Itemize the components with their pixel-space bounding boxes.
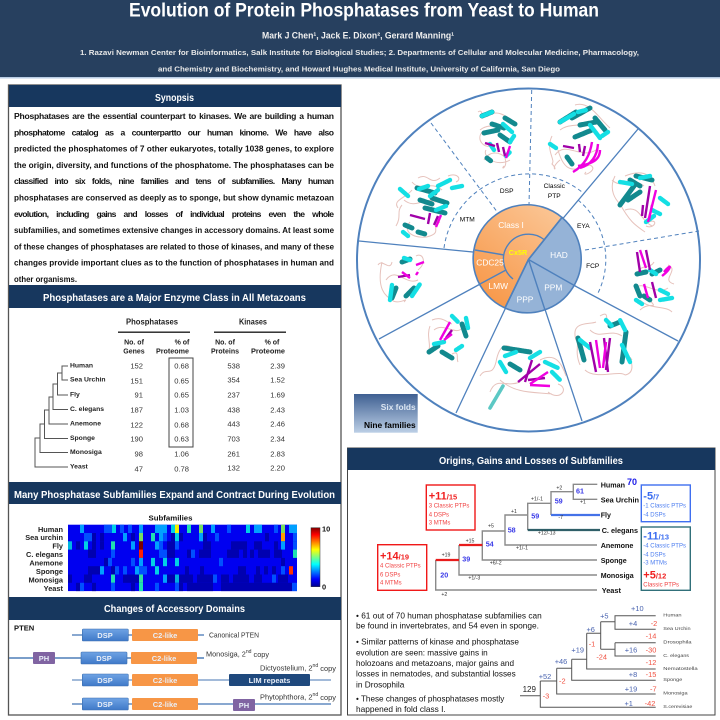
bullet text: be found in invertebrates, and 54 even in sponge. <box>356 621 539 631</box>
heatmap row labels: C. elegans <box>26 550 63 559</box>
kinase gains: +19 <box>571 646 584 654</box>
table headers: Kinases <box>239 318 267 326</box>
species labels: Monosiga <box>70 449 102 456</box>
edge labels: +19 <box>442 552 451 558</box>
synopsis text: the origin, diversity, and functions of the phosphatome. The phosphatases can be <box>14 160 334 170</box>
hub labels: HAD <box>550 250 568 260</box>
node counts: 61 <box>576 486 584 496</box>
kinase tree species <box>663 612 698 710</box>
tree species labels: Yeast <box>602 586 622 595</box>
panel: synopsis <box>9 85 341 284</box>
protein: PPM <box>575 314 632 375</box>
callout: +11/15: +11/15 <box>429 491 457 503</box>
table numbers: 132 <box>227 464 240 472</box>
edge labels: +1/-3 <box>468 575 480 581</box>
table numbers: 0.63 <box>174 434 189 444</box>
table numbers: 0.68 <box>174 362 189 370</box>
kinase gains: +4 <box>629 619 637 628</box>
bullet text <box>356 610 542 714</box>
hub: orange class I sector <box>473 205 562 308</box>
kinase gains: +46 <box>555 657 567 666</box>
node counts: 59 <box>555 496 563 506</box>
table numbers: 237 <box>227 390 240 400</box>
panel: accessory domains <box>9 597 341 711</box>
table numbers: 703 <box>227 434 240 444</box>
domain row: Phytophthora: nd <box>312 692 318 698</box>
table numbers: 0.68 <box>174 420 189 430</box>
kinase tree species: Monosiga <box>663 690 688 696</box>
synopsis text: evolution, including gains and losses of individual proteins even the whole <box>14 209 334 219</box>
table numbers: 1.52 <box>270 376 285 384</box>
domain row: Dictyostelium: Dictyostelium, 2 <box>260 664 311 672</box>
hub labels: CDC25 <box>476 258 504 268</box>
table numbers: 152 <box>130 362 143 370</box>
tree species labels: Human <box>601 480 625 490</box>
kinase gains: +6 <box>586 625 595 634</box>
table numbers: 2.46 <box>270 420 285 428</box>
edge labels <box>441 485 586 598</box>
domain row: canonical PTEN: DSP <box>97 631 113 640</box>
table numbers: 91 <box>135 390 143 400</box>
edge labels: +1 <box>580 500 586 506</box>
node counts: 39 <box>462 554 470 564</box>
protein: MTM <box>396 175 462 237</box>
edge labels: +15 <box>466 539 475 545</box>
domain row: Monosiga: PH <box>39 654 49 663</box>
table numbers: 261 <box>227 450 240 458</box>
synopsis text <box>14 111 334 284</box>
panel: origins, gains and losses <box>348 448 715 715</box>
protein: EYA <box>612 173 668 232</box>
kinase tree species: Sea Urchin <box>663 626 691 632</box>
tree species labels: Anemone <box>601 541 633 550</box>
domain row: Phytophthora: PH <box>239 701 249 710</box>
callout: -11/13 and +5/12: Classic PTPs <box>643 583 679 589</box>
protein: CDC25 <box>378 255 424 302</box>
node counts: 59 <box>531 512 539 520</box>
authors: Mark J Chen¹, Jack E. Dixon², Gerard Manning¹ <box>262 30 454 40</box>
heatmap row labels: Fly <box>52 542 64 550</box>
table headers: Proteome <box>156 348 189 356</box>
family labels: PTP <box>548 193 561 200</box>
kinase losses: -7 <box>650 684 657 694</box>
protein: PPP <box>480 346 566 408</box>
table numbers: 0.65 <box>174 376 189 386</box>
table headers: No. of <box>215 340 236 346</box>
callout: -11/13 and +5/12 <box>641 527 690 590</box>
affiliations <box>80 48 639 74</box>
synopsis text: other organisms. <box>14 274 77 284</box>
species tree <box>35 366 68 467</box>
title: Evolution of Protein Phosphatases from Yeast to Human <box>129 0 599 22</box>
table headers: Genes <box>123 348 145 356</box>
table headers: % of <box>175 340 190 346</box>
callout: -5/7: -4 DSPs <box>643 512 666 518</box>
node counts: 58 <box>508 526 516 534</box>
kinase losses: -2 <box>651 619 657 628</box>
bullet text: • Similar patterns of kinase and phosphatase <box>356 636 519 646</box>
callout: -5/7: -1 Classic PTPs <box>643 504 686 510</box>
node counts <box>440 477 637 580</box>
edge labels: +1/-1 <box>531 496 543 502</box>
table numbers: 438 <box>227 406 240 414</box>
callout: -5/7 <box>641 485 690 522</box>
family labels: FCP <box>586 263 600 270</box>
table numbers: 0.65 <box>174 390 189 400</box>
synopsis text: predicted the phosphatomes of 7 other eukaryotes, totally 1038 genes, to explore <box>14 144 334 154</box>
kinase tree species: Sponge <box>663 677 683 683</box>
table headers: Proteins <box>211 348 239 356</box>
kinase gains <box>539 604 644 708</box>
table numbers: 98 <box>135 450 143 458</box>
panel: major enzyme class <box>9 285 341 474</box>
callout: +14/19 <box>378 545 427 590</box>
family labels <box>460 183 600 270</box>
wheel legend: Nine families <box>364 420 416 430</box>
table numbers: 187 <box>130 406 143 414</box>
callout: +11/15: 3 MTMs <box>429 521 450 527</box>
table headers <box>118 318 286 356</box>
species labels <box>70 362 106 470</box>
synopsis text: subfamilies, and sometimes extensive changes in accessory domains. At least some <box>14 225 334 235</box>
callout: +11/15 <box>426 485 475 530</box>
hub: blue sector <box>505 218 581 313</box>
family labels: EYA <box>577 223 590 230</box>
header banner <box>0 0 720 78</box>
protein: DSP <box>478 111 515 168</box>
affiliations: 1. Razavi Newman Center for Bioinformatics, Salk Institute for Biological Studies; 2. Departments of Cellular and Molecular Medicine, Pharmacology, <box>80 48 639 57</box>
table numbers: 538 <box>227 362 240 370</box>
callout: -11/13 and +5/12: +5/12 <box>643 570 666 582</box>
table numbers: 2.39 <box>270 362 285 370</box>
edge labels: +5 <box>488 523 494 529</box>
panel: subfamily heatmap <box>9 482 341 593</box>
heading: heatmap: Many Phosphatase Subfamilies Expand and Contract During Evolution <box>14 489 335 501</box>
domain row: Dictyostelium: DSP <box>97 676 113 685</box>
hub labels: LMW <box>489 281 508 291</box>
table headers: No. of <box>124 340 145 346</box>
protein: LMW <box>428 316 468 362</box>
kinase gains: +16 <box>625 646 637 654</box>
kinase losses: -30 <box>646 646 656 654</box>
hub dividers <box>475 218 577 310</box>
hub labels: Class I <box>498 220 524 230</box>
kinase gains: +52 <box>539 672 551 681</box>
bullet text: happened in fold class I. <box>356 704 446 714</box>
tree species labels: C. elegans <box>602 526 638 535</box>
wheel diagram: folds and families <box>357 88 700 432</box>
hub labels: PPM <box>544 282 562 292</box>
edge labels: +1 <box>511 509 517 515</box>
highlight box <box>169 358 193 447</box>
bullet text: evolution are seen: massive gains in <box>356 647 488 657</box>
kinase tree species: Human <box>663 612 682 618</box>
synopsis text: classified into six folds, nine families and tens of subfamilies. Many human <box>14 176 334 186</box>
subfamily tree <box>436 477 639 598</box>
tree species labels: Sea Urchin <box>601 496 639 504</box>
domain row: Phytophthora: DSP <box>97 700 113 709</box>
panel: left column frame <box>8 85 341 715</box>
species labels: Sponge <box>70 435 95 442</box>
colour scale <box>311 524 330 592</box>
tree species labels: Monosiga <box>601 571 635 580</box>
tree species labels: Sponge <box>601 556 627 565</box>
heatmap row labels: Human <box>38 525 63 534</box>
kinase losses: -2 <box>559 676 566 686</box>
domain row: Dictyostelium: C2-like <box>153 676 177 685</box>
kinase losses: -12 <box>646 658 656 667</box>
domain row: Monosiga: DSP <box>96 654 112 663</box>
callout: -11/13 and +5/12: -3 MTMs <box>643 561 667 567</box>
hub labels: Cx5R <box>509 248 528 257</box>
callout: -11/13 and +5/12: -4 Classic PTPs <box>643 544 686 550</box>
protein: FCP <box>634 250 674 312</box>
callout: +14/19: 4 MTMs <box>380 581 402 587</box>
domain row: Phytophthora: Phytophthora, 2 <box>260 692 311 702</box>
species labels: Fly <box>70 392 80 398</box>
family labels: Classic <box>544 183 566 190</box>
kinase losses: -42 <box>645 699 655 708</box>
species labels: C. elegans <box>70 406 104 413</box>
kinase tree species: Drosophila <box>663 640 692 646</box>
domain row: canonical PTEN: Canonical PTEN <box>209 630 259 640</box>
table numbers: 2.83 <box>270 450 285 458</box>
kinase losses: -14 <box>646 632 656 640</box>
edge labels: +2 <box>441 592 447 598</box>
table numbers: 122 <box>130 420 143 430</box>
callout: -5/7: -5/7 <box>643 491 659 503</box>
domain row: Dictyostelium: LIM repeats <box>249 676 290 685</box>
family labels: DSP <box>500 188 514 195</box>
domain row: Phytophthora: C2-like <box>153 700 177 709</box>
callout: +14/19: 4 Classic PTPs <box>380 564 421 570</box>
edge labels: -7 <box>558 515 563 521</box>
kinase losses: -3 <box>543 692 549 700</box>
domain row: Phytophthora: copy <box>318 692 336 702</box>
callout: +14/19: +14/19 <box>380 550 409 562</box>
table numbers: 2.20 <box>270 464 285 472</box>
bullet text: • These changes of phosphatases mostly <box>356 693 505 703</box>
kinase losses: -15 <box>646 670 656 679</box>
domain row: canonical PTEN <box>72 629 259 641</box>
table numbers: 1.06 <box>174 450 189 458</box>
synopsis text: of these changes of phosphatases are related to those of kinases, and many of these <box>14 241 334 251</box>
tree species labels <box>601 480 639 595</box>
domain row: Monosiga: nd <box>246 649 252 655</box>
table headers: % of <box>265 340 280 346</box>
heatmap row labels: Sponge <box>36 567 63 576</box>
heatmap title: Subfamilies <box>148 514 192 522</box>
heatmap row labels: Sea urchin <box>25 533 63 542</box>
table numbers: 2.43 <box>270 406 285 414</box>
node counts: 70 <box>627 477 637 487</box>
synopsis text: phosphatases are conserved as deeply as to sponge, but show dynamic metazoan <box>14 192 334 202</box>
kinase gains: +1 <box>624 699 633 708</box>
heatmap row labels: Monosiga <box>28 576 64 584</box>
kinase gains: +8 <box>629 670 637 679</box>
protein: classic PTP <box>550 104 610 174</box>
callout: +14/19: 6 DSPs <box>380 572 400 578</box>
edge labels: +1/-1 <box>516 545 528 551</box>
edge labels: +12/-13 <box>538 530 556 536</box>
wheel legend <box>354 394 418 433</box>
callout: +11/15: 4 DSPs <box>429 512 449 518</box>
kinase tree species: S.cerevisiae <box>663 704 693 710</box>
bullet text: losses in nematodes, and substantial losses <box>356 669 516 679</box>
edge labels: +2 <box>556 485 562 491</box>
PTEN label: PTEN <box>14 624 34 632</box>
heatmap row labels: Yeast <box>44 584 64 593</box>
affiliations: and Chemistry and Biochemistry, and Howard Hughes Medical Institute, University of California, San Diego <box>158 64 560 74</box>
edge labels: +6/-2 <box>490 561 502 567</box>
hub labels <box>476 220 568 304</box>
species labels: Sea Urchin <box>70 376 106 384</box>
species labels: Anemone <box>70 420 101 428</box>
synopsis text: changes provide important clues as to the function of phosphatases in human and <box>14 258 334 268</box>
species labels: Human <box>70 362 93 370</box>
species labels: Yeast <box>70 464 88 470</box>
table numbers: 1.69 <box>270 390 285 400</box>
domain row: Dictyostelium: nd <box>312 663 318 669</box>
table numbers: 443 <box>227 420 240 428</box>
kinase losses <box>543 619 657 708</box>
heading: origins: Origins, Gains and Losses of Subfamilies <box>439 455 623 467</box>
domain row: Dictyostelium: copy <box>318 664 336 672</box>
wheel dividers <box>359 90 699 421</box>
colour scale: 10 <box>322 524 330 534</box>
bullet text: in Drosophila <box>356 679 405 689</box>
table numbers: 151 <box>130 376 143 386</box>
callout: -11/13 and +5/12: -4 DSPs <box>643 552 666 558</box>
heatmap row labels: Anemone <box>29 558 63 568</box>
kinase tree species: C. elegans <box>663 653 690 659</box>
node counts: 20 <box>440 570 448 580</box>
table headers: Phosphatases <box>126 318 179 326</box>
callout: -11/13 and +5/12: -11/13 <box>643 531 669 543</box>
kinase tree <box>520 604 698 710</box>
table numbers: 190 <box>130 434 143 444</box>
kinase losses: -24 <box>596 652 607 662</box>
table numbers: 1.03 <box>174 406 189 414</box>
table numbers: 2.34 <box>270 434 285 444</box>
domain row: canonical PTEN: C2-like <box>153 631 177 640</box>
heading: synopsis: Synopsis <box>155 92 194 104</box>
synopsis text: phosphatome catalog as a counterpartto our human kinome. We have also <box>14 127 334 137</box>
table numbers: 47 <box>135 464 143 474</box>
table headers: Proteome <box>251 348 285 356</box>
node counts: 54 <box>486 540 494 548</box>
kinase losses: -1 <box>589 640 595 648</box>
colour scale: 0 <box>322 582 326 592</box>
domain row: Monosiga: C2-like <box>152 654 176 663</box>
family labels: MTM <box>460 216 475 224</box>
table numbers <box>130 362 285 474</box>
kinase gains: +19 <box>625 684 637 694</box>
domain row: Monosiga: copy <box>252 650 269 658</box>
wheel legend: Six folds <box>381 402 416 412</box>
outer circle <box>357 88 700 432</box>
kinase gains: +5 <box>600 612 609 620</box>
tree species labels: Fly <box>601 510 612 520</box>
domain row: Monosiga <box>9 649 269 664</box>
kinase gains: +10 <box>631 604 644 613</box>
callout: +11/15: 3 Classic PTPs <box>429 504 469 510</box>
domain row: Dictyostelium <box>72 663 336 686</box>
bullet text: • 61 out of 70 human phosphatase subfamilies can <box>356 610 542 620</box>
root count: 129 <box>523 685 537 694</box>
domain row: Phytophthora <box>72 692 336 711</box>
bullet text: holozoans and metazoans, major gains and <box>356 658 514 668</box>
domain row: Monosiga: Monosiga, 2 <box>206 650 245 658</box>
kinase tree species: Nematostella <box>663 666 698 672</box>
table numbers: 0.78 <box>174 464 189 474</box>
heatmap <box>68 525 297 591</box>
hub labels: PPP <box>517 294 534 304</box>
synopsis text: Phosphatases are the essential counterpart to kinases. We are building a human <box>14 111 334 121</box>
heading: accessory domains: Changes of Accessory Domains <box>104 603 245 615</box>
heading: major enzyme class: Phosphatases are a Major Enzyme Class in All Metazoans <box>43 292 306 304</box>
heatmap row labels <box>25 525 64 593</box>
table numbers: 354 <box>227 376 240 384</box>
